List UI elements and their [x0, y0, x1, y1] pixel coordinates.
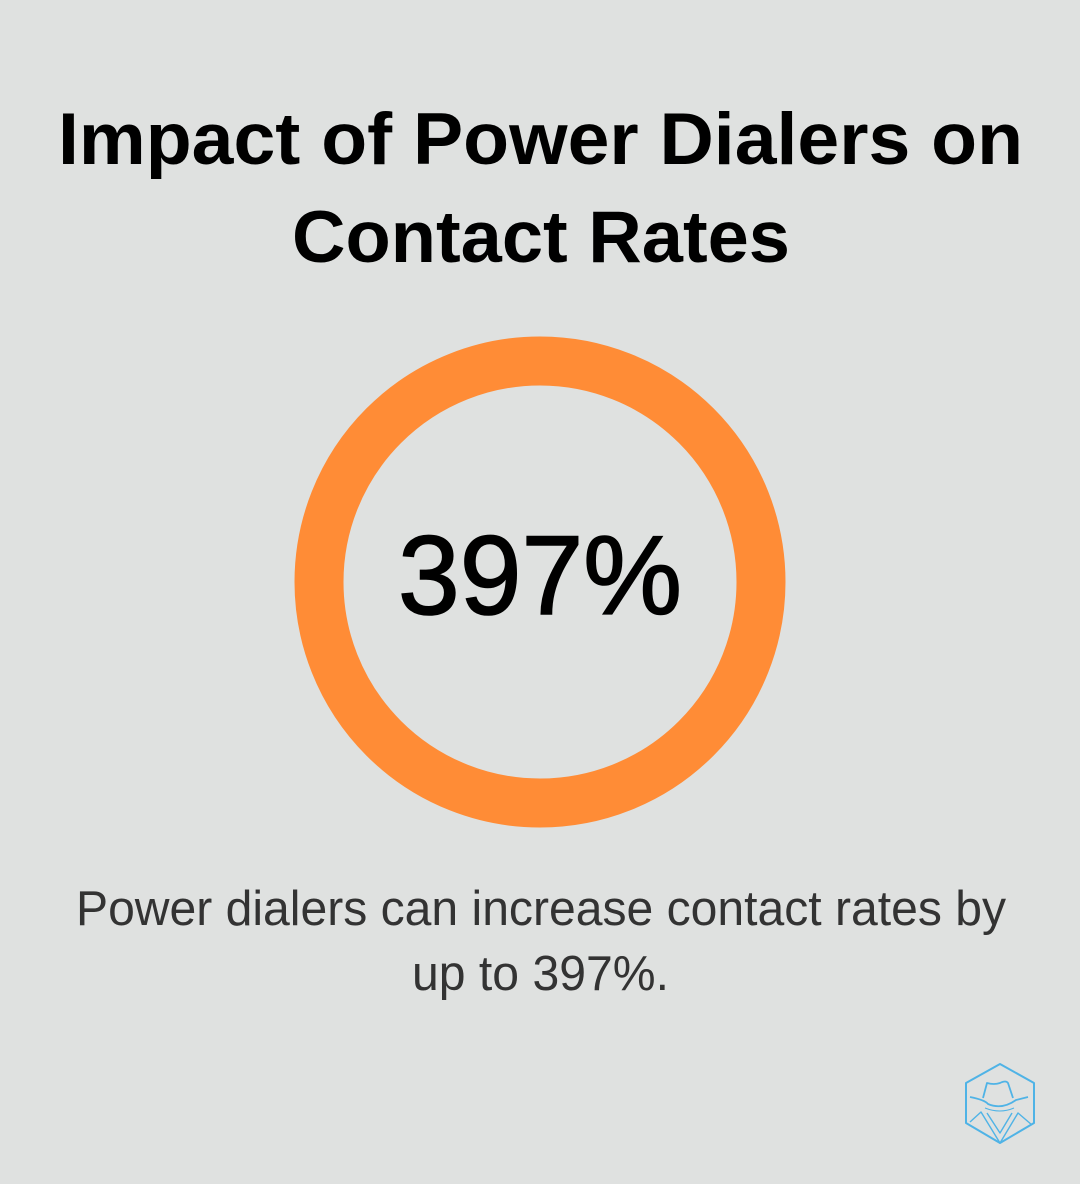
icon: logo hexagon with hat: [966, 1064, 1034, 1143]
caption: Power dialers can increase contact rates by: [76, 882, 1006, 936]
caption: [76, 882, 1006, 1001]
big number: 397%: [398, 513, 682, 638]
title: Contact Rates: [292, 197, 790, 278]
title: Impact of Power Dialers on: [58, 99, 1023, 180]
donut ring: [319, 361, 761, 803]
title: [58, 99, 1023, 278]
caption: up to 397%.: [412, 947, 669, 1001]
